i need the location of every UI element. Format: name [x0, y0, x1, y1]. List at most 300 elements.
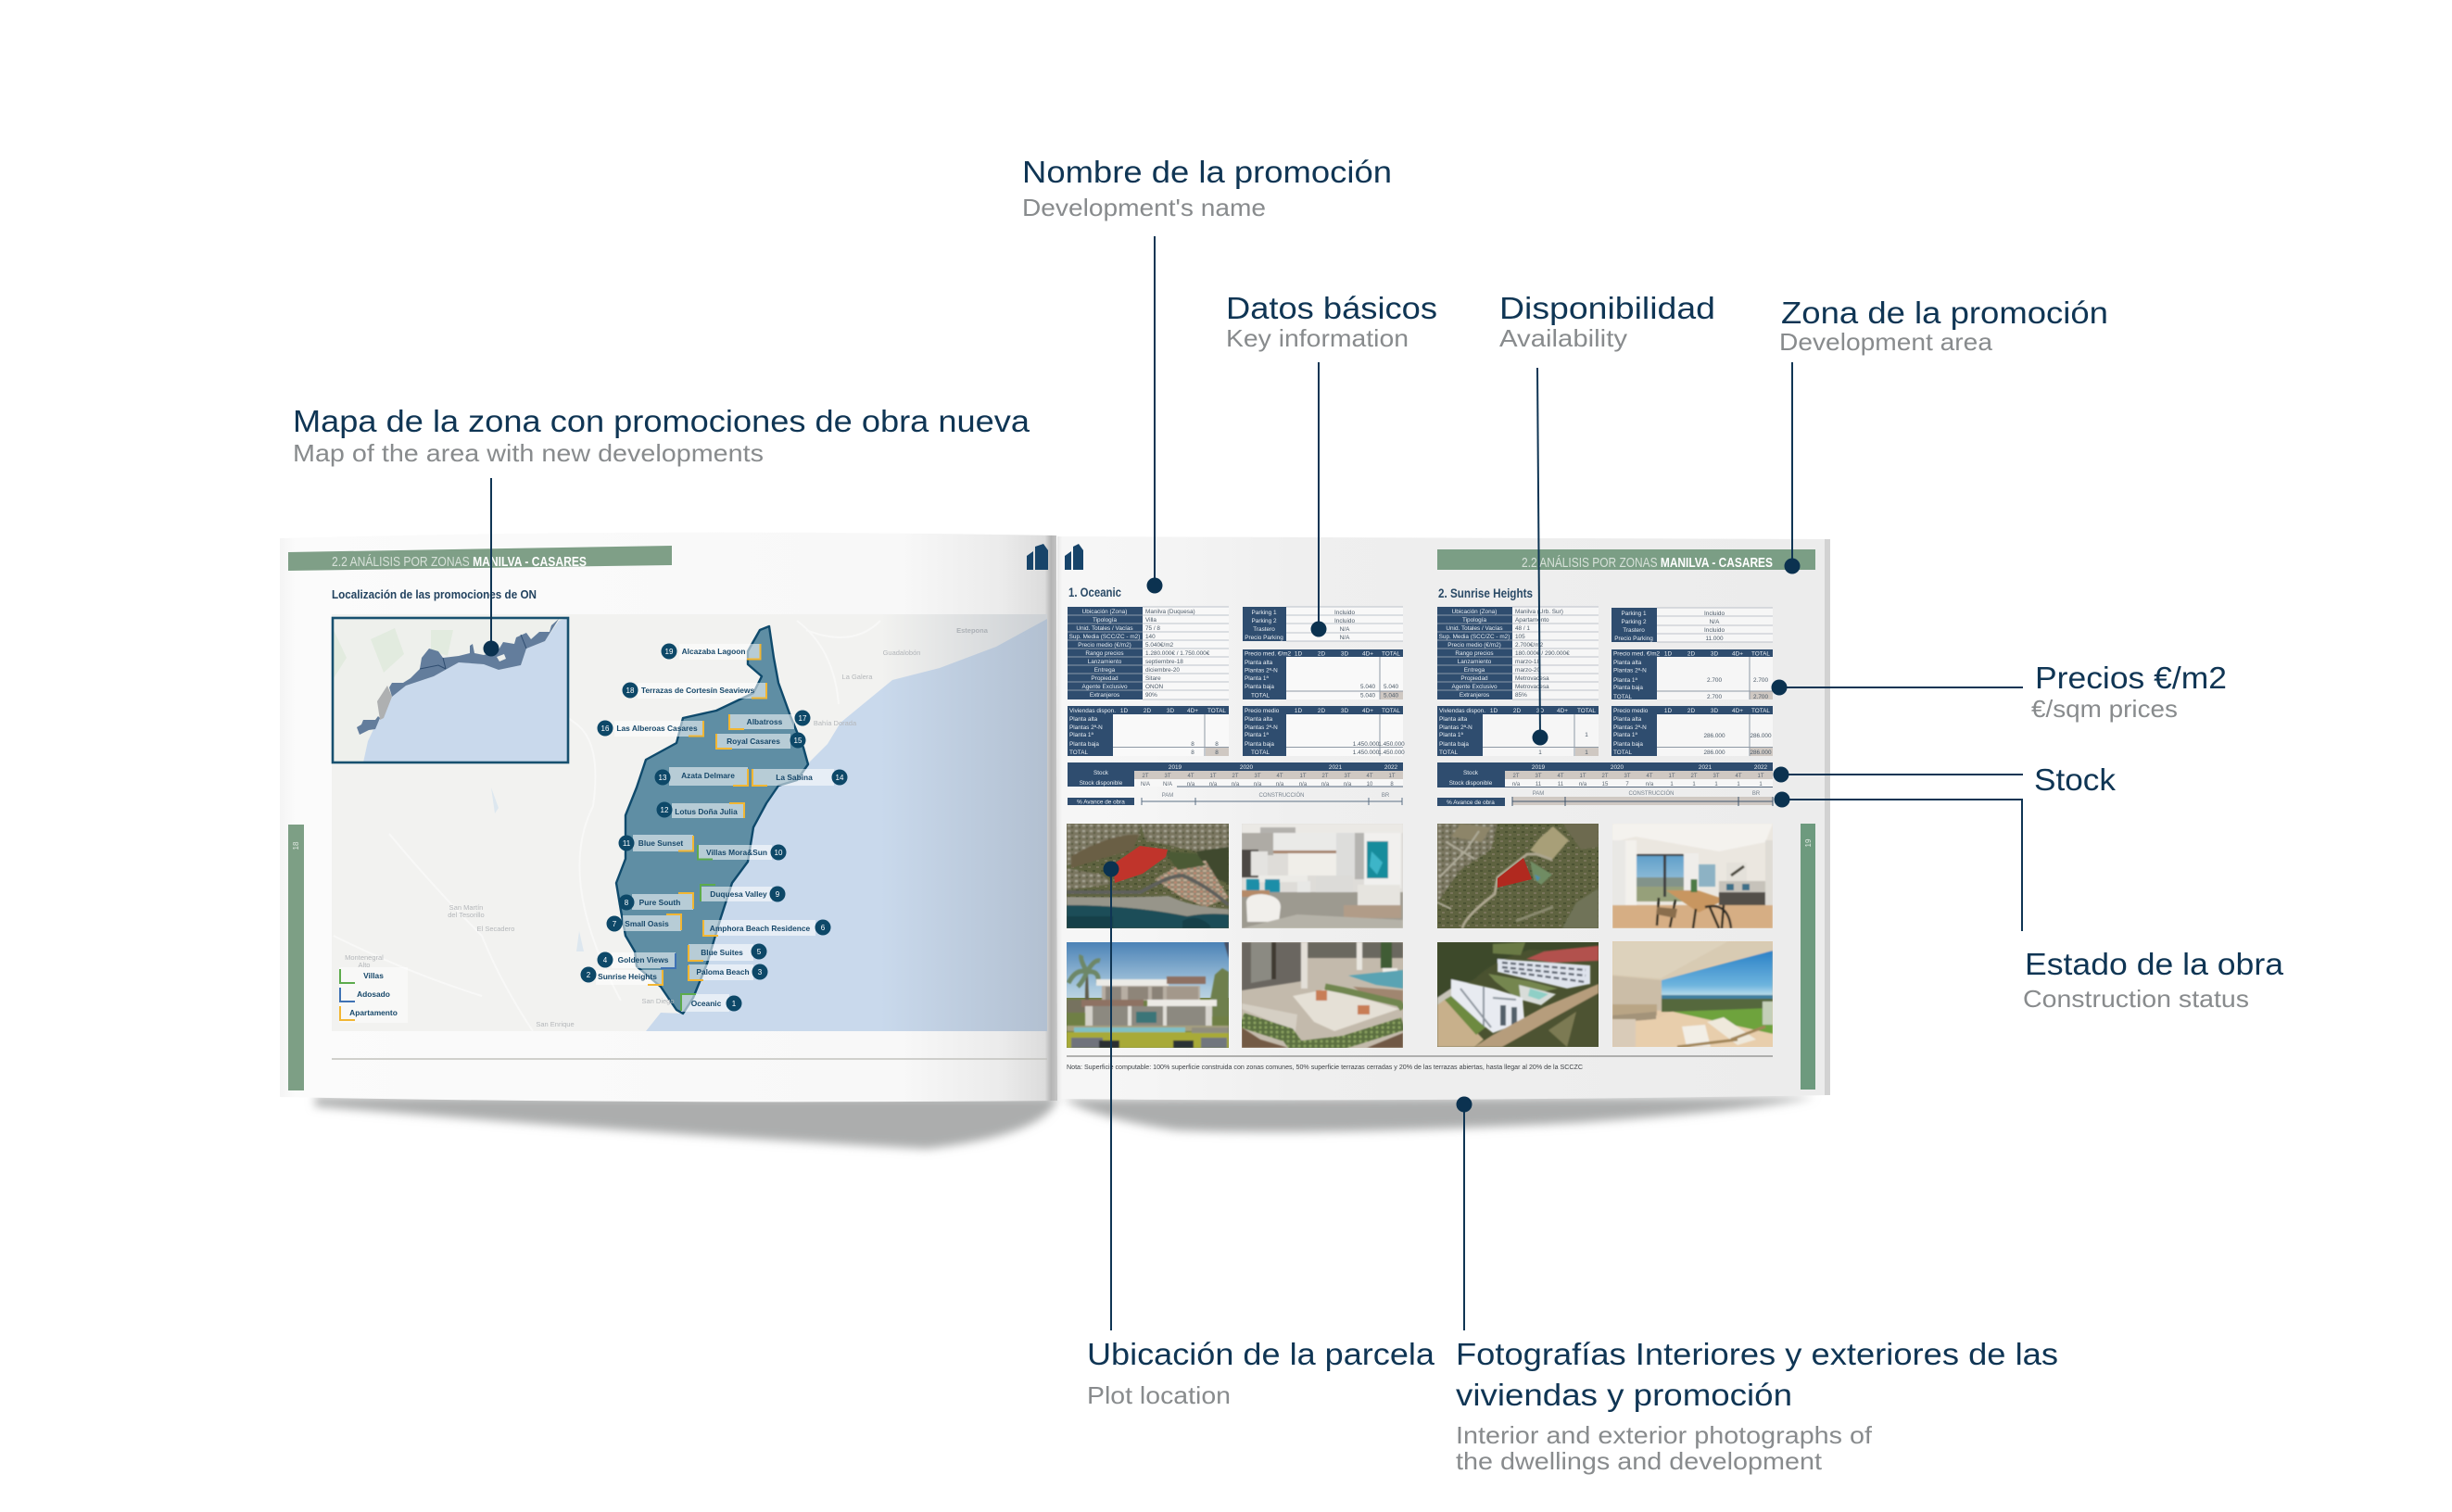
table: Oceanic basic data: Precio medio (€/m2) [1078, 642, 1131, 649]
table: Sunrise units available: TOTAL [1439, 750, 1458, 756]
table: Oceanic extras [1243, 607, 1403, 641]
callout: key information: Datos básicos [1226, 291, 1437, 325]
callout: photographs: viviendas y promoción [1456, 1378, 1792, 1412]
table: Oceanic basic data: Ubicación (Zona) [1082, 609, 1127, 615]
label 8: Pure South [639, 898, 680, 907]
right page header band [1437, 549, 1815, 571]
callout: photographs: the dwellings and development [1456, 1447, 1823, 1475]
label 15 [716, 732, 806, 749]
label 18: 18 [626, 687, 635, 695]
table: Oceanic extras: N/A [1340, 626, 1350, 633]
logo: left page [1027, 544, 1048, 570]
map place names: El Secadero [477, 925, 514, 933]
table: Oceanic price per sqm: Plantas 2ª-N [1245, 667, 1278, 674]
table: Oceanic average price [1243, 706, 1405, 756]
table: Oceanic stock: 2019 [1169, 764, 1182, 771]
table: Oceanic units available: Planta alta [1069, 716, 1098, 723]
callout: map of the area: Map of the area with new developments [293, 439, 764, 467]
label 14: 14 [836, 774, 844, 782]
table: Sunrise price per sqm: 2D [1687, 650, 1695, 658]
callout: photographs [1456, 1097, 2058, 1475]
table: Oceanic stock: 8 [1390, 782, 1394, 788]
table: Sunrise basic data: 2.700€/m2 [1515, 642, 1544, 649]
timeline: Sunrise construction status: % Avance de obra [1447, 800, 1495, 806]
label 8 [619, 893, 693, 910]
label 11 [619, 835, 693, 851]
table: Oceanic stock: 4T [1187, 774, 1194, 779]
table: Sunrise stock: 1T [1757, 774, 1764, 779]
label 3: 3 [758, 968, 763, 976]
table: Sunrise units available: 4D+ [1557, 708, 1568, 714]
table: Oceanic units available: 8 [1215, 741, 1219, 748]
table: Sunrise price per sqm: 1D [1664, 650, 1672, 658]
label 17: 17 [799, 714, 807, 723]
table: Sunrise units available: Planta baja [1439, 741, 1469, 748]
table: Sunrise units available: Viviendas dispon. [1439, 708, 1485, 714]
table: Sunrise extras: Incluido [1704, 627, 1725, 634]
table: Sunrise extras [1611, 608, 1773, 642]
label 6: Amphora Beach Residence [710, 924, 811, 933]
table: Sunrise units available: Plantas 2ª-N [1439, 724, 1472, 731]
label 16 [597, 721, 703, 737]
map legend [339, 967, 408, 1023]
table: Sunrise units available [1437, 706, 1599, 756]
photo: Oceanic outdoor lounge [1242, 942, 1403, 1048]
table: Sunrise price per sqm: Plantas 2ª-N [1613, 667, 1647, 674]
map legend: Adosado [357, 989, 390, 999]
callout: construction status: Estado de la obra [2025, 947, 2284, 981]
callout: key information: Key information [1226, 324, 1409, 352]
table: Oceanic basic data: Extranjeros [1090, 692, 1119, 699]
table: Sunrise basic data: Agente Exclusivo [1451, 684, 1498, 690]
label 7: 7 [613, 920, 617, 928]
label 15: Royal Casares [727, 737, 780, 746]
table: Sunrise units available: 1 [1538, 750, 1542, 756]
right page header band: 2.2 ANÁLISIS POR ZONAS MANILVA - CASARES [1522, 555, 1773, 571]
table: Sunrise extras: N/A [1710, 619, 1720, 625]
label 17 [729, 710, 810, 729]
table: Sunrise stock: 1 [1692, 782, 1696, 788]
callout: availability: Disponibilidad [1499, 291, 1715, 325]
left page side tab: 18 [292, 841, 300, 850]
table: Oceanic basic data: Manilva (Duquesa) [1145, 609, 1195, 615]
table: Oceanic stock: n/a [1321, 782, 1330, 788]
table: Sunrise stock: Stock disponible [1449, 780, 1493, 787]
callout: development area [1779, 296, 2108, 574]
table: Oceanic average price: 1.450.000 [1353, 741, 1380, 748]
map place names: del Tesorillo [448, 911, 485, 919]
label 5: Blue Suites [701, 948, 743, 957]
label 13: Azata Delmare [681, 771, 735, 780]
label 1: 1 [732, 1000, 737, 1008]
map place names: San Diego [641, 997, 675, 1005]
photo: Oceanic plot aerial [1067, 824, 1229, 928]
table: Sunrise basic data: marzo-20 [1515, 667, 1540, 674]
label 13: 13 [659, 774, 667, 782]
callout: plot location: Ubicación de la parcela [1087, 1337, 1435, 1371]
label 11: Blue Sunset [638, 838, 683, 848]
map place names: Montenegral [345, 953, 384, 962]
table: Oceanic basic data: 1.280.000€ / 1.750.000€ [1145, 650, 1210, 657]
table: Oceanic average price: Planta 1ª [1245, 732, 1269, 738]
table: Oceanic extras: Parking 1 [1251, 610, 1277, 616]
table: Sunrise stock: n/a [1646, 782, 1654, 788]
table: Oceanic stock: 3T [1164, 774, 1171, 779]
table: Oceanic price per sqm: Planta baja [1245, 684, 1274, 690]
table: Oceanic units available: 4D+ [1187, 708, 1198, 714]
table: Sunrise stock: 3T [1624, 774, 1631, 779]
table: Sunrise basic data: Metrovacesa [1515, 684, 1549, 690]
table: Oceanic stock: Stock disponible [1080, 780, 1123, 787]
table: Oceanic stock [1068, 762, 1403, 788]
label 4 [597, 952, 676, 968]
table: Oceanic basic data: ONON [1145, 684, 1164, 690]
timeline: Sunrise construction status: BR [1752, 791, 1761, 797]
table: Oceanic price per sqm: 3D [1341, 650, 1348, 658]
table: Oceanic stock: n/a [1344, 782, 1352, 788]
callout: development name: Development's name [1022, 194, 1266, 221]
table: Sunrise average price: 286.000 [1750, 733, 1772, 739]
table: Sunrise basic data: Metrovacesa [1515, 675, 1549, 682]
callout: photographs: Interior and exterior photographs of [1456, 1421, 1873, 1449]
table: Oceanic stock: n/a [1299, 782, 1308, 788]
table: Sunrise basic data: Tipología [1462, 617, 1486, 624]
table: Sunrise basic data [1437, 607, 1599, 699]
table: Sunrise stock: 2T [1512, 774, 1520, 779]
table: Sunrise price per sqm [1611, 649, 1773, 700]
label 6 [703, 919, 830, 936]
table: Sunrise price per sqm: Planta 1ª [1613, 677, 1637, 684]
table: Oceanic stock: 4T [1276, 774, 1283, 779]
callout: stock: Stock [2034, 762, 2117, 797]
table: Sunrise basic data: Precio medio (€/m2) [1447, 642, 1501, 649]
right page side tab: 19 [1804, 838, 1813, 847]
table: Oceanic stock: 1T [1299, 774, 1307, 779]
callout: construction status [1774, 791, 2284, 1013]
inset map [333, 618, 568, 762]
table: Oceanic price per sqm: 5.040 [1384, 693, 1398, 699]
label 10: Villas Mora&Sun [706, 848, 767, 857]
table: Sunrise stock: 7 [1625, 782, 1629, 788]
table: Oceanic stock: 1T [1209, 774, 1217, 779]
label 2: 2 [587, 971, 591, 979]
table: Sunrise price per sqm: 2.700 [1707, 677, 1722, 684]
table: Sunrise stock: 2020 [1611, 764, 1624, 771]
label 19: 19 [665, 648, 674, 656]
table: Oceanic stock: 3T [1254, 774, 1261, 779]
map legend: Villas [363, 971, 384, 980]
table: Sunrise stock: 4T [1557, 774, 1564, 779]
map place names: La Galera [842, 673, 873, 681]
table: Sunrise basic data: Ubicación (Zona) [1452, 609, 1497, 615]
table: Sunrise basic data: 105 [1515, 634, 1525, 640]
label 12: Lotus Doña Julia [675, 807, 738, 816]
table: Oceanic average price: 1.450.000 [1378, 750, 1405, 756]
table: Oceanic price per sqm: 5.040 [1360, 693, 1375, 699]
table: Sunrise price per sqm: 2.700 [1753, 694, 1768, 700]
left page header band: 2.2 ANÁLISIS POR ZONAS MANILVA - CASARES [332, 554, 587, 570]
table: Sunrise price per sqm: Planta alta [1613, 660, 1642, 666]
table: Oceanic basic data: Rango precios [1085, 650, 1124, 657]
table: Sunrise units available: TOTAL [1577, 708, 1596, 714]
footnote: Nota: Superficie computable: 100% superficie construida con zonas comunes, 50% superficie terrazas cerradas y 20% de las terrazas abiertas, hasta llegar al 20% de la SCCZC [1067, 1065, 1583, 1071]
table: Oceanic units available: Planta 1ª [1069, 732, 1093, 738]
table: Sunrise price per sqm: 3D [1711, 650, 1718, 658]
photo: Sunrise terrace view [1612, 941, 1773, 1047]
table: Oceanic price per sqm: Planta alta [1245, 660, 1273, 666]
table: Sunrise price per sqm: Planta baja [1613, 685, 1643, 691]
map labels [580, 643, 847, 1012]
table: Sunrise units available: 1D [1490, 708, 1498, 714]
table: Sunrise extras: Precio Parking [1614, 636, 1653, 642]
table: Sunrise average price: Plantas 2ª-N [1613, 724, 1647, 731]
label 12 [656, 802, 744, 818]
table: Oceanic average price: 4D+ [1362, 708, 1373, 714]
table: Sunrise stock: 2022 [1754, 764, 1768, 771]
label 16: 16 [601, 724, 610, 733]
table: Sunrise basic data: 180.000€ / 290.000€ [1515, 650, 1570, 657]
table: Oceanic extras: Trastero [1253, 626, 1275, 633]
photo: Sunrise plot aerial [1437, 824, 1599, 928]
map legend: Apartamento [349, 1008, 398, 1017]
table: Oceanic extras: Precio Parking [1245, 635, 1283, 641]
label 1: Oceanic [691, 999, 722, 1008]
left page side tab [288, 825, 304, 1090]
timeline: Oceanic construction status [1068, 792, 1402, 806]
table: Oceanic basic data: 75 / 8 [1145, 625, 1160, 632]
table: Sunrise price per sqm: 4D+ [1732, 650, 1743, 658]
table: Oceanic basic data: septiembre-18 [1145, 659, 1183, 665]
table: Sunrise extras: Parking 2 [1622, 619, 1647, 625]
table: Oceanic average price: Planta baja [1245, 741, 1274, 748]
panel: open brochure [280, 533, 1830, 1149]
table: Oceanic average price: 1.450.000 [1353, 750, 1380, 756]
table: Oceanic units available: 3D [1167, 708, 1174, 714]
label 19 [662, 643, 760, 660]
table: Sunrise average price: 1D [1664, 708, 1672, 714]
callout: development area: Development area [1779, 328, 1993, 356]
table: Oceanic units available: TOTAL [1207, 708, 1226, 714]
table: Oceanic average price: 3D [1341, 708, 1348, 714]
table: Sunrise price per sqm: Precio med. €/m2 [1613, 650, 1661, 658]
table: Oceanic basic data: Sup. Media (SCC/ZC - m2) [1069, 634, 1140, 640]
table: Oceanic average price: Precio medio [1245, 708, 1280, 714]
table: Sunrise average price: 286.000 [1750, 750, 1772, 756]
table: Sunrise average price: Precio medio [1613, 708, 1649, 714]
callout: plot location [1087, 862, 1435, 1409]
table: Oceanic units available: 1D [1120, 708, 1128, 714]
table: Oceanic stock: n/a [1276, 782, 1284, 788]
table: Oceanic stock: n/a [1209, 782, 1218, 788]
table: Oceanic stock: N/A [1141, 782, 1150, 788]
table: Oceanic stock: N/A [1163, 782, 1172, 788]
label 4: Golden Views [618, 955, 669, 964]
table: Sunrise basic data: Propiedad [1460, 675, 1488, 682]
table: Oceanic basic data: Agente Exclusivo [1081, 684, 1128, 690]
timeline: Sunrise construction status: CONSTRUCCIÓN [1629, 790, 1674, 797]
table: Sunrise basic data: Sup. Media (SCC/ZC - m2) [1439, 634, 1510, 640]
label 4: 4 [603, 956, 608, 964]
table: Oceanic price per sqm: TOTAL [1251, 693, 1270, 699]
table: Oceanic extras: Incluido [1334, 618, 1355, 624]
table: Oceanic basic data: Unid. Totales / Vacías [1076, 625, 1133, 632]
table: Oceanic stock: 4T [1366, 774, 1373, 779]
table: Oceanic stock: 2021 [1329, 764, 1343, 771]
table: Oceanic basic data: 140 [1145, 634, 1156, 640]
photo: Sunrise living room [1612, 824, 1773, 928]
table: Oceanic units available [1068, 706, 1229, 756]
map place names: Guadalobón [883, 649, 920, 657]
table: Sunrise price per sqm: TOTAL [1613, 694, 1632, 700]
timeline: Sunrise construction status [1437, 790, 1773, 806]
callout: stock [1774, 762, 2117, 797]
table: Oceanic average price: Plantas 2ª-N [1245, 724, 1278, 731]
photo: Oceanic interior kitchen [1242, 824, 1403, 928]
table: Sunrise basic data: Extranjeros [1460, 692, 1489, 699]
timeline: Oceanic construction status: % Avance de obra [1077, 799, 1125, 806]
table: Sunrise stock: 3T [1535, 774, 1542, 779]
label 19: Alcazaba Lagoon [682, 647, 745, 656]
callout: availability: Availability [1499, 324, 1627, 352]
table: Sunrise stock: 1T [1579, 774, 1586, 779]
map place names: Estepona [956, 626, 989, 635]
table: Sunrise stock: 1 [1670, 782, 1674, 788]
table: Sunrise stock: Stock [1463, 770, 1479, 776]
label 5 [689, 943, 767, 961]
timeline: Oceanic construction status: BR [1382, 793, 1390, 799]
table: Sunrise average price: Planta 1ª [1613, 732, 1637, 738]
map place names: Bahía Dorada [814, 719, 857, 727]
table: Oceanic price per sqm: 4D+ [1362, 650, 1373, 658]
label 12: 12 [661, 806, 669, 814]
development title: Sunrise Heights: 2. Sunrise Heights [1438, 586, 1533, 600]
table: Sunrise stock: 4T [1646, 774, 1653, 779]
table: Oceanic units available: Plantas 2ª-N [1069, 724, 1103, 731]
table: Oceanic average price: Planta alta [1245, 716, 1273, 723]
timeline: Oceanic construction status: CONSTRUCCIÓN [1258, 792, 1305, 799]
table: Sunrise stock: 2T [1690, 774, 1698, 779]
table: Sunrise average price: 3D [1711, 708, 1718, 714]
table: Sunrise stock: 4T [1735, 774, 1742, 779]
table: Sunrise stock: n/a [1512, 782, 1521, 788]
table: Sunrise stock: 2T [1601, 774, 1609, 779]
table: Sunrise units available: 2D [1513, 708, 1521, 714]
label 14: La Sabina [776, 773, 813, 782]
table: Sunrise price per sqm: 2.700 [1753, 677, 1768, 684]
table: Oceanic average price: 2D [1318, 708, 1325, 714]
table: Sunrise average price: TOTAL [1613, 750, 1632, 756]
label 6: 6 [821, 924, 826, 932]
table: Sunrise stock: 11 [1536, 782, 1542, 788]
table: Oceanic basic data: Villa [1145, 617, 1156, 624]
label 2: Sunrise Heights [598, 972, 657, 981]
table: Sunrise average price: Planta alta [1613, 716, 1642, 723]
label 18 [623, 682, 766, 699]
table: Sunrise extras: Trastero [1623, 627, 1645, 634]
table: Sunrise stock: 1T [1668, 774, 1675, 779]
development title: Oceanic: 1. Oceanic [1068, 586, 1121, 599]
table: Oceanic basic data: Sitare [1145, 675, 1161, 682]
map place names [345, 626, 989, 1028]
label 9 [701, 885, 786, 902]
table: Sunrise extras: Parking 1 [1622, 611, 1647, 617]
table: Sunrise units available: 1 [1585, 732, 1588, 738]
table: Oceanic price per sqm: 1D [1295, 650, 1302, 658]
timeline: Oceanic construction status: PAM [1162, 793, 1173, 799]
table: Sunrise stock: 15 [1602, 782, 1609, 788]
book shadow [315, 1097, 1814, 1149]
label 1 [681, 994, 741, 1012]
label 17: Albatross [747, 717, 783, 726]
label 14 [752, 769, 847, 786]
table: Sunrise units available: Planta 1ª [1439, 732, 1463, 738]
table: Oceanic price per sqm [1243, 649, 1403, 699]
callout: map of the area [293, 404, 1030, 656]
table: Oceanic units available: 8 [1191, 741, 1194, 748]
table: Sunrise basic data: Unid. Totales / Vacías [1446, 625, 1503, 632]
table: Oceanic price per sqm: 5.040 [1360, 684, 1375, 690]
table: Sunrise average price: TOTAL [1751, 708, 1770, 714]
label 18: Terrazas de Cortesín Seaviews [641, 686, 754, 695]
table: Sunrise units available: 3D [1536, 708, 1544, 714]
map heading: Localización de las promociones de ON [332, 588, 537, 601]
table: Oceanic stock: 10 [1367, 782, 1373, 788]
table: Oceanic stock: n/a [1254, 782, 1262, 788]
table: Sunrise stock: 2019 [1532, 764, 1546, 771]
label 15: 15 [794, 737, 803, 745]
label 10 [698, 845, 786, 860]
callout: photographs: Fotografías Interiores y exteriores de las [1456, 1337, 2058, 1371]
photo: Sunrise building aerial [1437, 942, 1599, 1047]
callout: prices: €/sqm prices [2031, 695, 2178, 723]
left page header band [288, 546, 672, 571]
panel: right page [1057, 536, 1830, 1100]
panel: left page [280, 533, 1057, 1102]
callout: construction status: Construction status [2023, 985, 2249, 1013]
map place names: San Enrique [536, 1020, 575, 1028]
table: Oceanic stock: 3T [1344, 774, 1351, 779]
table: Oceanic extras: N/A [1340, 635, 1350, 641]
table: Oceanic basic data: Entrega [1094, 667, 1116, 674]
label 3 [689, 964, 767, 980]
label 11: 11 [623, 839, 631, 848]
table: Oceanic average price: 1D [1295, 708, 1302, 714]
table: Sunrise average price: 286.000 [1703, 733, 1725, 739]
table: Oceanic average price: 1.450.000 [1378, 741, 1405, 748]
table: Oceanic price per sqm: 2D [1318, 650, 1325, 658]
table: Oceanic extras: Incluido [1334, 610, 1355, 616]
table: Sunrise units available: 1 [1585, 750, 1588, 756]
table: Sunrise units available: Planta alta [1439, 716, 1468, 723]
table: Sunrise average price [1611, 706, 1773, 756]
table: Oceanic basic data: Lanzamiento [1088, 659, 1122, 665]
table: Sunrise extras: Incluido [1704, 611, 1725, 617]
table: Oceanic stock: 2T [1142, 774, 1149, 779]
label 7 [606, 914, 681, 932]
callout: plot location: Plot location [1087, 1381, 1231, 1409]
table: Sunrise basic data: Manilva (Urb. Sur) [1515, 609, 1563, 615]
callout: map of the area: Mapa de la zona con promociones de obra nueva [293, 404, 1030, 438]
table: Oceanic units available: 8 [1191, 750, 1194, 756]
table: Oceanic stock: n/a [1232, 782, 1240, 788]
callout: key information [1226, 291, 1437, 637]
table: Oceanic basic data: 90% [1145, 692, 1157, 699]
table: Sunrise average price: 286.000 [1703, 750, 1725, 756]
label 10: 10 [775, 849, 783, 857]
table: Sunrise basic data: Entrega [1464, 667, 1485, 674]
table: Oceanic average price: TOTAL [1382, 708, 1400, 714]
table: Oceanic basic data: Tipología [1093, 617, 1117, 624]
